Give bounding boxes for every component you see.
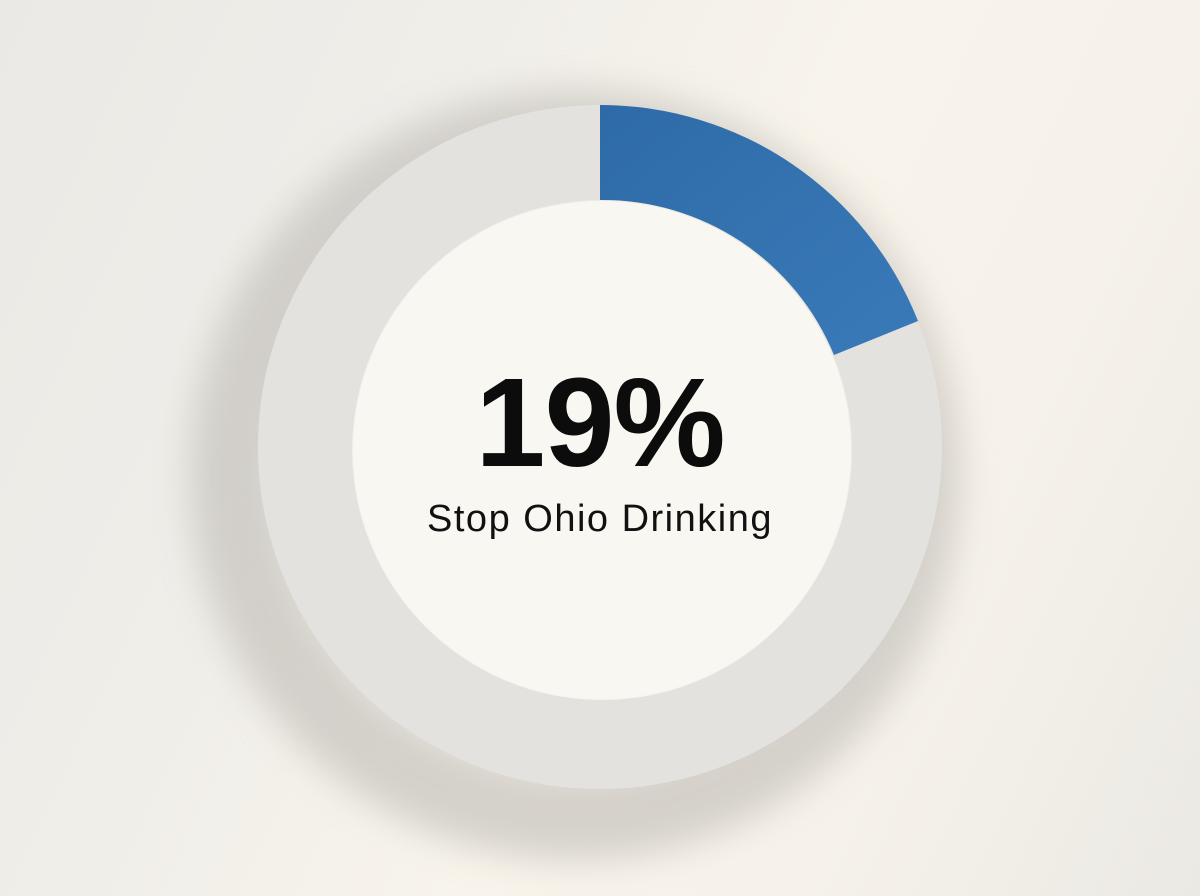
blue segment 19% — [600, 105, 918, 355]
ring track — [258, 105, 942, 789]
ring shadow — [235, 135, 915, 815]
center value: 19% — [475, 352, 725, 493]
inner face — [353, 201, 851, 699]
center label: Stop Ohio Drinking — [427, 498, 773, 540]
